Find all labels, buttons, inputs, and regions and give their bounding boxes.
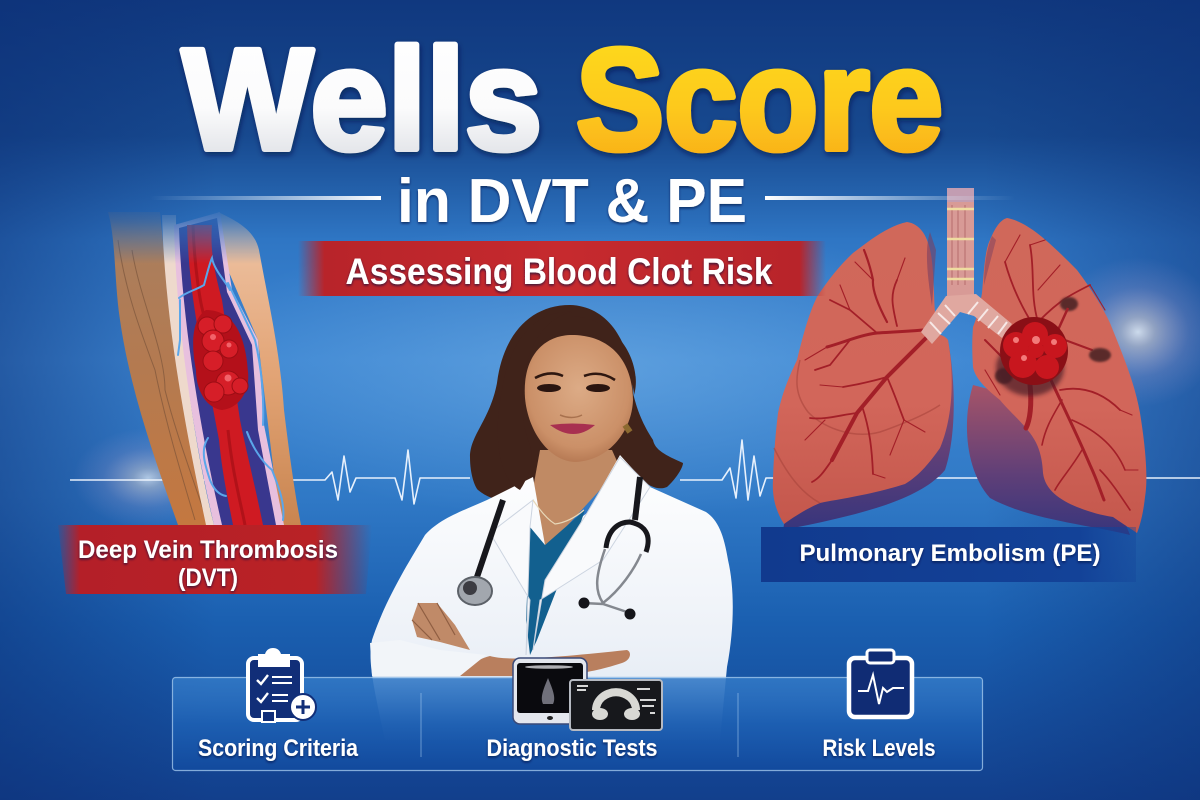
neck — [530, 450, 620, 550]
hair front — [498, 312, 636, 490]
outer calf skin — [108, 212, 214, 525]
blue vein branches — [178, 258, 283, 520]
clot cluster — [193, 310, 248, 410]
title: Wells Score: Wells — [182, 19, 542, 180]
inner calf skin — [218, 212, 301, 525]
hair back — [470, 305, 683, 500]
icon: risk levels clipboard — [849, 650, 912, 717]
banner: Pulmonary Embolism (PE) — [761, 527, 1136, 582]
banner: Assessing Blood Clot Risk: Assessing Blood Clot Risk — [346, 251, 773, 292]
icon: scoring criteria clipboard — [248, 648, 316, 722]
subtitle: in DVT & PE — [150, 167, 1015, 236]
eyes, brows, lips — [535, 373, 630, 434]
crossed arms — [370, 603, 630, 676]
ECG heartbeat line — [70, 440, 1200, 504]
dark infarct spots — [995, 297, 1111, 384]
right lung rear lobe — [967, 385, 1130, 535]
title: Wells Score — [182, 19, 943, 180]
illustration: lungs with pulmonary embolism — [773, 188, 1146, 535]
title: Wells Score: Score — [576, 19, 943, 180]
opened vein channel — [174, 212, 284, 525]
banner: Deep Vein Thrombosis (DVT): Deep Vein Thrombosis — [78, 536, 338, 564]
label: Scoring Criteria: Scoring Criteria — [198, 735, 359, 762]
blood clot — [996, 317, 1068, 396]
banner: Assessing Blood Clot Risk — [298, 241, 826, 296]
pale strip beside vein — [162, 215, 214, 525]
right lung front — [972, 218, 1146, 533]
illustration: leg with deep vein thrombosis — [108, 212, 301, 525]
banner: Deep Vein Thrombosis (DVT): (DVT) — [178, 564, 238, 592]
banner: Deep Vein Thrombosis (DVT) — [58, 525, 372, 594]
scrub top — [526, 510, 585, 655]
stethoscope — [458, 477, 648, 620]
lab coat body — [371, 455, 733, 740]
subtitle: in DVT & PE: in DVT & PE — [397, 167, 747, 236]
panel: bottom features — [172, 648, 982, 770]
face — [525, 335, 633, 462]
vein blood vessel — [187, 225, 263, 525]
label: Diagnostic Tests: Diagnostic Tests — [486, 735, 658, 762]
icon: diagnostic tests monitors — [513, 658, 662, 730]
left lung rear lobe — [783, 340, 954, 530]
lapels — [490, 457, 650, 655]
left lung front — [773, 222, 952, 524]
necklace — [533, 500, 584, 524]
banner: Pulmonary Embolism (PE): Pulmonary Embolism (PE) — [800, 540, 1100, 567]
label: Risk Levels: Risk Levels — [822, 735, 936, 762]
trachea — [921, 188, 1012, 344]
doctor portrait — [370, 305, 733, 740]
